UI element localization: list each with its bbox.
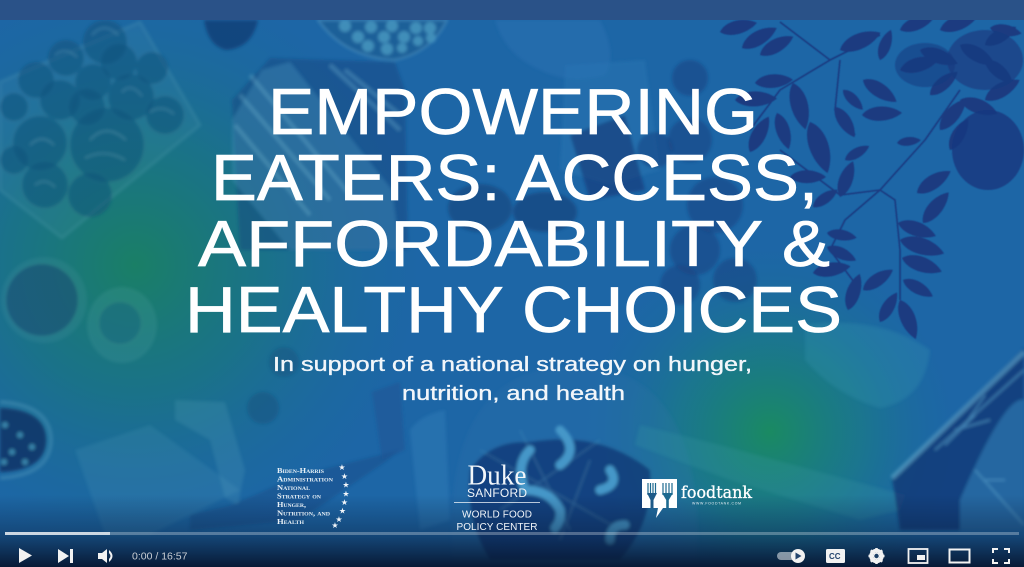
video progress bar: [5, 532, 1019, 535]
icon: fullscreen: [993, 549, 1009, 563]
branch of dark leaves at top right: [718, 9, 1024, 342]
playback time: 0:00 / 16:57: [132, 550, 188, 562]
logo: national strategy: ★: [342, 490, 350, 498]
tomatoes on the vine: [637, 60, 757, 305]
logo: foodtank: WWW.FOODTANK.COM: [692, 502, 741, 506]
fig: [204, 20, 258, 50]
bowl of seeds, avocado and small bowl at left: [0, 257, 157, 478]
top band: [0, 0, 1024, 20]
logo: national strategy: ★: [341, 498, 348, 507]
logo: national strategy: ★: [335, 515, 343, 524]
tray of brussels sprouts: [0, 20, 200, 238]
title: [185, 75, 842, 346]
title: EATERS: ACCESS,: [211, 141, 818, 214]
title: AFFORDABILITY &: [198, 207, 830, 280]
logo: national strategy: ★: [339, 506, 346, 516]
logo: national strategy: Biden-Harris: [277, 467, 324, 475]
title: EMPOWERING: [268, 75, 758, 148]
dark seeded bread on right of title: [448, 60, 660, 232]
logo: national strategy: ★: [342, 480, 350, 490]
serving spoon across the table: [638, 428, 898, 515]
subtitle: nutrition, and health: [402, 383, 625, 405]
title: HEALTHY CHOICES: [185, 273, 842, 346]
white jug at top centre: [561, 60, 608, 76]
logo: national strategy: ★: [338, 463, 346, 472]
logo: national strategy: Hunger,: [277, 501, 306, 509]
salad bowl with pepper rings: [412, 412, 652, 557]
logo: national strategy: Health: [277, 518, 304, 526]
logo: national strategy: [277, 463, 350, 530]
logo: national strategy: Strategy on: [277, 492, 321, 500]
icon: play: [19, 548, 32, 563]
logo: Duke Sanford World Food Policy Center: [454, 460, 540, 533]
wooden tray with rosemary at right: [892, 348, 1024, 530]
subtitle: [273, 354, 752, 405]
icon: next: [58, 549, 73, 563]
pale bulb: [805, 323, 930, 408]
logo: national strategy: Administration: [277, 476, 333, 484]
icon: autoplay toggle: [777, 549, 805, 563]
icon: volume: [98, 549, 112, 563]
logo: Duke Sanford World Food Policy Center: SANFORD: [467, 486, 527, 500]
cutting board with wrap at bottom left: [75, 347, 405, 535]
logo: national strategy: Nutrition, and: [277, 510, 330, 518]
logo: national strategy: ★: [341, 472, 348, 481]
logo: national strategy: ★: [331, 521, 339, 530]
logo: Duke Sanford World Food Policy Center: Duke: [468, 460, 526, 492]
logo: Duke Sanford World Food Policy Center: WORLD FOOD: [462, 510, 532, 520]
asparagus dish: [232, 58, 408, 250]
icon: theatre mode: [950, 550, 970, 562]
bowl of chickpeas: [318, 20, 447, 60]
subtitle: In support of a national strategy on hunger,: [273, 354, 752, 376]
logo: foodtank: [642, 479, 753, 518]
icon: closed captions: [826, 549, 845, 563]
icon: closed captions: CC: [829, 552, 841, 561]
icon: settings gear: [868, 548, 884, 564]
logo: foodtank: foodtank: [681, 483, 753, 503]
logo: national strategy: National: [277, 484, 311, 492]
icon: miniplayer: [908, 549, 928, 563]
logo: Duke Sanford World Food Policy Center: POLICY CENTER: [456, 522, 538, 533]
